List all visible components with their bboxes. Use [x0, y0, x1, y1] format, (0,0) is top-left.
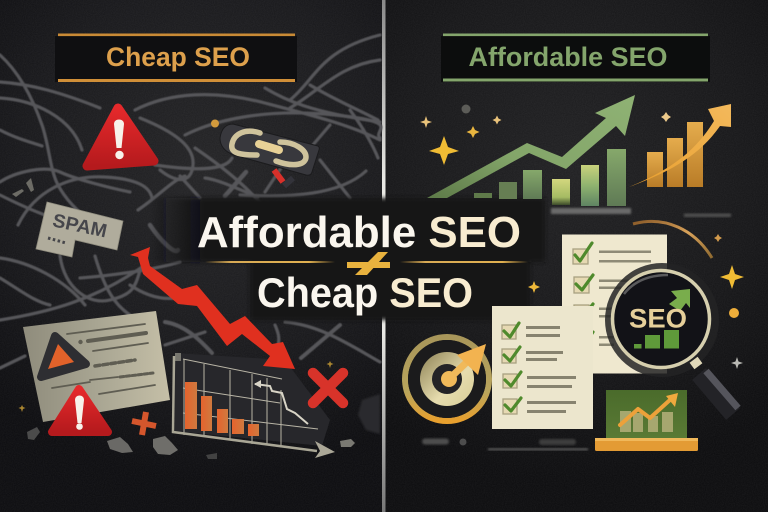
icon: play warning badge	[41, 336, 86, 377]
spam tag: SPAM	[51, 210, 109, 242]
rising green bar chart with arrow	[427, 95, 731, 217]
center banner backdrop	[150, 198, 545, 320]
not-equal separator	[205, 252, 528, 275]
icon: magnifying glass	[605, 263, 738, 414]
icon: broken chain link	[211, 120, 319, 186]
icon: warning triangle bottom	[52, 389, 108, 432]
icon: warning triangle top	[87, 108, 154, 166]
sparkles right bottom	[720, 265, 744, 369]
center divider line	[382, 0, 386, 512]
icon: red x	[313, 373, 343, 403]
spam tag	[36, 202, 123, 257]
icon: target with arrow	[405, 337, 489, 421]
right lower shadows and pills	[422, 438, 588, 450]
tangled strands	[0, 35, 381, 368]
icon: green panel trend chart	[595, 390, 698, 451]
icon: debris chips	[12, 178, 34, 197]
header: affordable seo	[441, 34, 710, 82]
back checklist	[562, 234, 667, 374]
debris blobs	[27, 394, 380, 459]
orange bar chart with swoosh arrow	[629, 104, 731, 187]
header: cheap seo: Cheap SEO	[106, 42, 250, 72]
sparkles right top	[420, 104, 722, 293]
header: affordable seo: Affordable SEO	[468, 42, 668, 72]
small gold sparkles left	[18, 361, 334, 412]
icon: orange plus	[132, 412, 156, 435]
icon: magnifying glass: SEO	[629, 304, 687, 334]
red falling arrow	[130, 247, 295, 369]
center title	[197, 208, 528, 316]
document with warning	[23, 311, 170, 432]
declining chart	[173, 353, 335, 458]
decorative gold arc	[633, 221, 712, 258]
panel: affordable seo background	[384, 0, 768, 512]
panel: cheap seo background	[0, 0, 384, 512]
header: cheap seo	[55, 34, 297, 82]
center title: Affordable SEO	[197, 208, 521, 257]
center title: Cheap SEO	[257, 269, 473, 316]
front checklist	[492, 306, 593, 429]
